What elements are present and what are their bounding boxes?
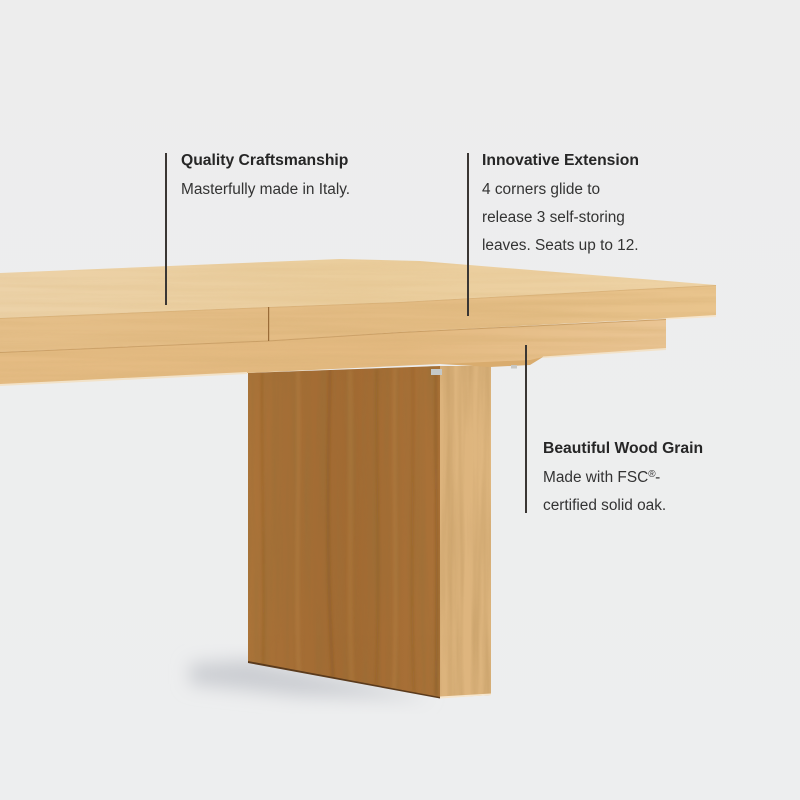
callout: beautiful wood grain: Beautiful Wood Grain (543, 440, 703, 457)
photo: oak table corner (0, 259, 716, 703)
callout: quality craftsmanship: Quality Craftsmanship (181, 152, 348, 169)
leader line: quality craftsmanship (165, 153, 167, 305)
underside bracket and hardware (431, 352, 543, 375)
table top surface (0, 255, 720, 320)
callout: quality craftsmanship (181, 152, 350, 198)
callout: quality craftsmanship: Masterfully made in Italy. (181, 181, 350, 198)
callout: innovative extension: Innovative Extension (482, 152, 639, 169)
callout: beautiful wood grain: Made with FSC®- (543, 469, 660, 486)
callout: beautiful wood grain: certified solid oak. (543, 497, 666, 514)
callout: beautiful wood grain (543, 440, 703, 514)
table top front edge (0, 283, 720, 355)
callout: innovative extension (482, 152, 639, 254)
table apron (0, 319, 666, 386)
callout: innovative extension: leaves. Seats up to 12. (482, 237, 639, 254)
callout: innovative extension: 4 corners glide to (482, 181, 600, 198)
leader line: innovative extension (467, 153, 469, 316)
callout: innovative extension: release 3 self-storing (482, 209, 625, 226)
table leg (248, 360, 491, 700)
leader line: beautiful wood grain (525, 345, 527, 513)
floor shadow (190, 660, 432, 698)
